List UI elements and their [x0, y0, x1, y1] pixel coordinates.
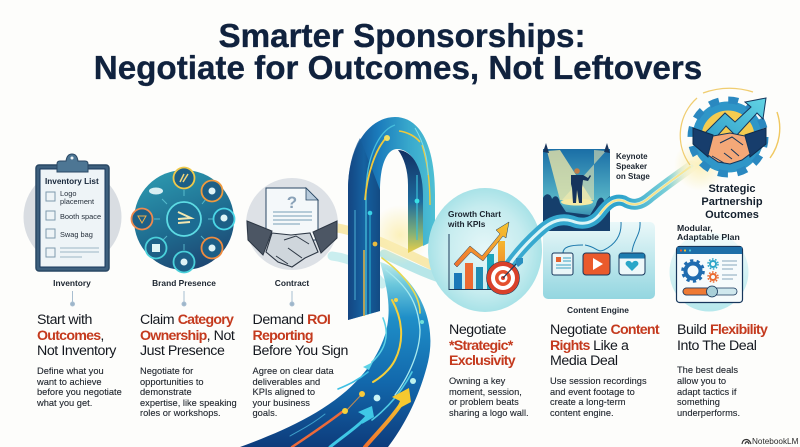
pale ribbons behind the arch [332, 205, 452, 284]
hands [708, 133, 750, 164]
column 1 text: , [100, 328, 104, 344]
column 2 text: demonstrate [140, 387, 192, 397]
column 3 text: deliverables and [252, 377, 320, 387]
column 3 text: KPIs aligned to [252, 387, 315, 397]
column 1 text: Start with [37, 312, 92, 328]
label: strategic partnership outcomes: Strategic [708, 183, 756, 195]
column 4 text: Owning a key [449, 376, 505, 386]
glow behind partnership icon [674, 139, 726, 191]
column 6 text: underperforms. [677, 408, 740, 418]
column 3 text: Demand ROI [252, 312, 330, 328]
column 5 text: Like a [590, 338, 629, 354]
label: content engine: Content Engine [567, 305, 629, 315]
column 3 text: goals. [252, 408, 277, 418]
column 2 text: opportunities to [140, 377, 204, 387]
label: keynote speaker: Keynote [616, 152, 648, 161]
title [94, 18, 702, 87]
chart axes [449, 234, 505, 290]
column 1 text: Outcomes [37, 328, 101, 344]
column 5 text: create a long-term [550, 397, 626, 407]
column 2 text: Just Presence [140, 343, 225, 359]
panel: content engine [543, 222, 655, 299]
column 3 text [252, 312, 348, 418]
column 6 text: something [677, 397, 720, 407]
speaker [571, 168, 591, 203]
column 1 text: want to achieve [36, 377, 102, 387]
column 2 text: Ownership [140, 328, 208, 344]
growth arrow [703, 98, 766, 142]
wave ribbon [510, 166, 692, 264]
trend arrow [454, 222, 509, 267]
icon: inventory clipboard [24, 154, 122, 271]
icon: inventory clipboard: Logo [60, 189, 76, 198]
column 1 text: Define what you [37, 366, 104, 376]
icon: brand presence [132, 168, 234, 272]
panel: keynote stage [543, 143, 610, 231]
icon: video [583, 253, 610, 275]
column 3 text: your business [252, 398, 310, 408]
list heading: Inventory List [45, 177, 99, 186]
column 6 text: Into The Deal [677, 338, 757, 354]
watermark: NotebookLM: NotebookLM [752, 437, 799, 446]
column 2 text [140, 312, 237, 418]
column 4 text: sharing a logo wall. [449, 408, 529, 418]
column 6 text: allow you to [677, 376, 726, 386]
column 5 text: Rights [550, 338, 590, 354]
column 3 text: Agree on clear data [252, 366, 334, 376]
column 5 text: Use session recordings [550, 376, 647, 386]
slider [683, 286, 737, 297]
column 4 text [449, 322, 529, 418]
bar chart [454, 241, 505, 289]
column 3 text: Reporting [252, 328, 313, 344]
label: modular plan: Modular, [677, 223, 713, 233]
label: growth chart: with KPIs [447, 219, 486, 229]
label: strategic partnership outcomes: Outcomes [705, 209, 759, 221]
column 4 text: moment, session, [449, 387, 522, 397]
target icon [486, 258, 523, 294]
growth chart [447, 209, 523, 294]
label: strategic partnership outcomes: Partnership [701, 196, 763, 208]
label: growth chart: Growth Chart [448, 209, 501, 219]
column 1 text: what you get. [36, 398, 92, 408]
column 1 text [36, 312, 122, 408]
column 4 text: or problem beats [449, 397, 519, 407]
label: inventory: Inventory [53, 278, 91, 288]
column 1 text: Not Inventory [37, 343, 117, 359]
column 3 text: Before You Sign [252, 343, 348, 359]
column 2 text: expertise, like speaking [140, 398, 237, 408]
column 1 text: before you negotiate [37, 387, 122, 397]
column 4 text: Exclusivity [449, 353, 516, 369]
column 5 text: Media Deal [550, 353, 618, 369]
icon: article card [552, 253, 573, 275]
icon: heart window [619, 253, 645, 275]
audience [543, 194, 610, 231]
column 5 text: Negotiate Content [550, 322, 659, 338]
column 2 text: roles or workshops. [140, 408, 221, 418]
panel: modular plan [670, 232, 748, 312]
label: modular plan: Adaptable Plan [677, 232, 740, 242]
road [240, 258, 430, 447]
list items [46, 192, 99, 257]
column 6 text: Build Flexibility [677, 322, 767, 338]
column 5 text: content engine. [550, 408, 614, 418]
label: keynote speaker: on Stage [616, 172, 650, 181]
icon: inventory clipboard: Swag bag [60, 230, 93, 239]
icon: strategic partnership [680, 88, 780, 174]
title: Negotiate for Outcomes, Not Leftovers [94, 50, 702, 87]
connectors [70, 291, 294, 306]
column 5 text: and event footage to [550, 387, 635, 397]
label: keynote speaker: Speaker [616, 162, 647, 171]
icon: contract handshake [246, 178, 338, 270]
arch [348, 117, 435, 320]
column 2 text: Claim Category [140, 312, 233, 328]
column 4 text: *Strategic* [449, 338, 514, 354]
panel: growth circle [428, 188, 542, 312]
icon: inventory clipboard: Booth space [60, 212, 101, 221]
column 4 text: Negotiate [449, 322, 506, 338]
column 2 text: Negotiate for [140, 366, 193, 376]
column 6 text [677, 322, 768, 418]
icon: inventory clipboard: placement [60, 197, 94, 206]
label: brand presence: Brand Presence [152, 278, 216, 288]
suits [693, 128, 713, 157]
label: contract: Contract [275, 278, 309, 288]
column 6 text: adapt tactics if [677, 387, 737, 397]
spotlights [543, 143, 610, 153]
title: Smarter Sponsorships: [218, 18, 586, 55]
column 6 text: The best deals [677, 365, 738, 375]
icon: contract handshake: ? [287, 193, 297, 212]
column 2 text: , Not [207, 328, 235, 344]
column 5 text [550, 322, 660, 418]
icon: gears [682, 259, 737, 282]
